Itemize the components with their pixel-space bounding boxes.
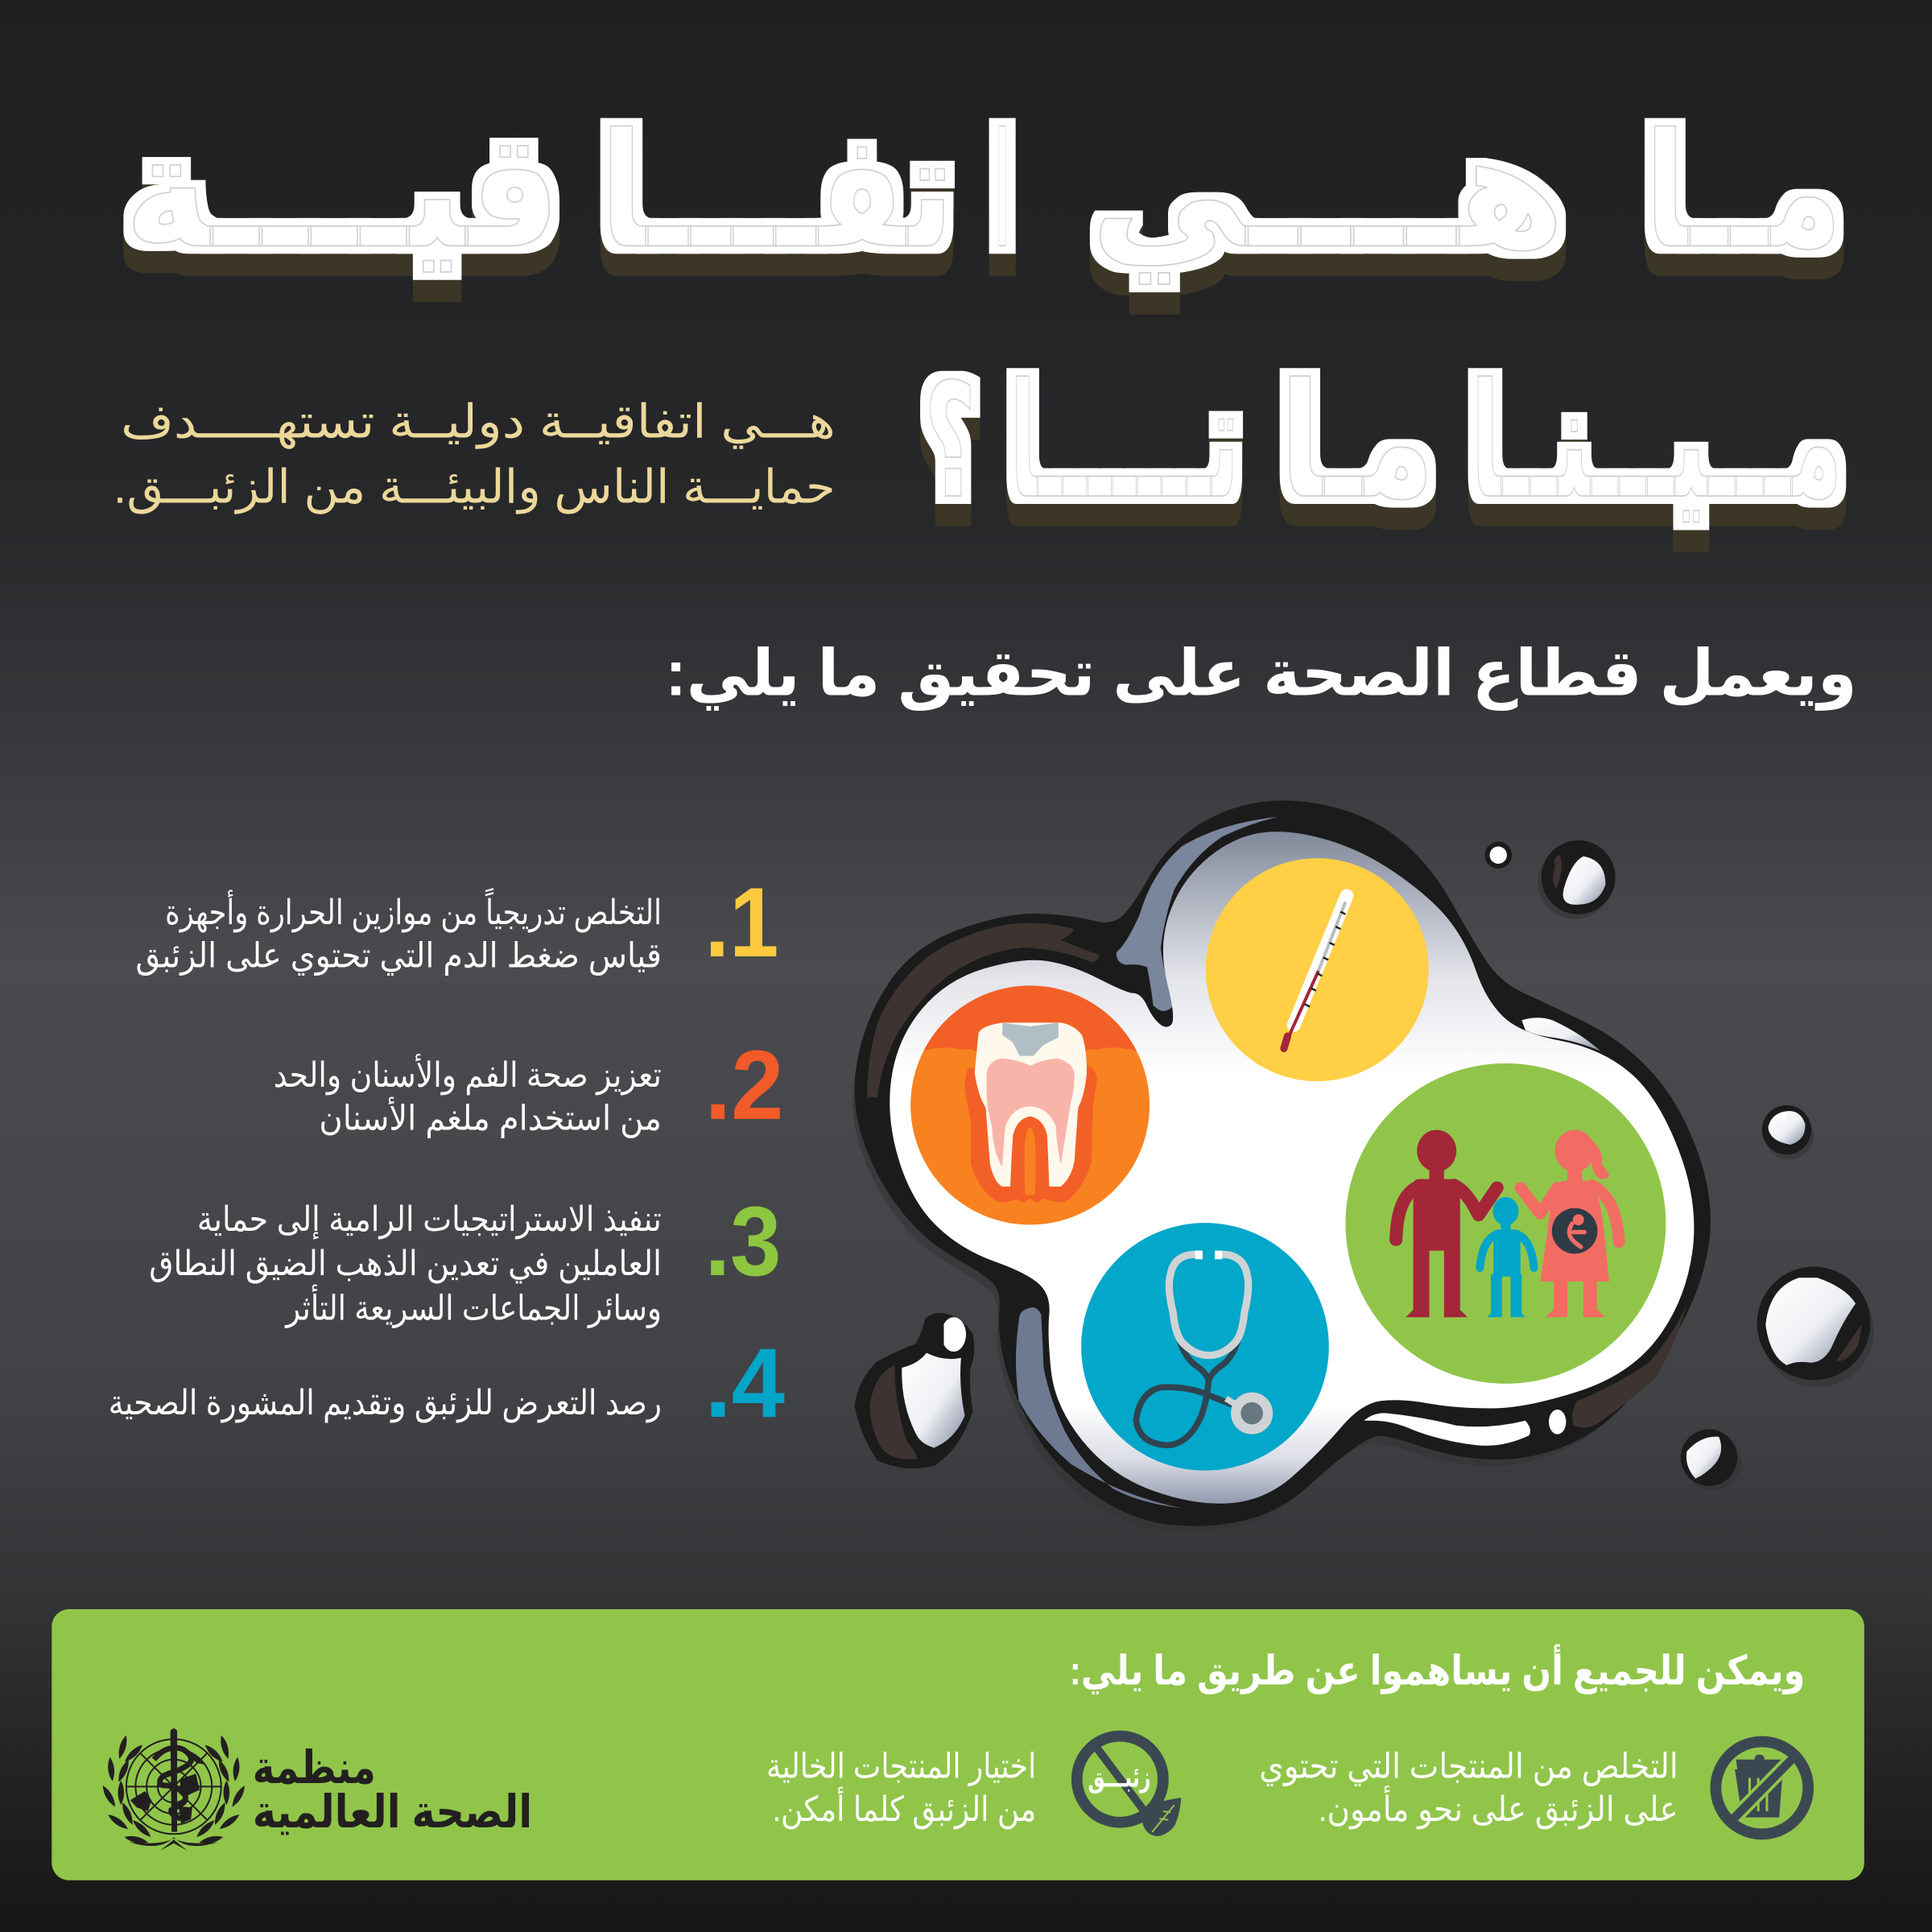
- title line 2: مـا: [1280, 353, 1435, 530]
- woman: [1521, 1130, 1619, 1317]
- logo: WHO name: منظمة: [253, 1743, 376, 1794]
- laurel left: [100, 1735, 153, 1846]
- title line 2: تـــــــا: [1010, 353, 1238, 530]
- item 3 text: تنفيذ الاستراتيجيات الرامية إلى حماية: [197, 1200, 662, 1240]
- list item 2: [274, 1030, 783, 1140]
- action text: choose: [766, 1748, 1036, 1830]
- section heading: ويعمل قطاع الصحة على تحقيق ما يلي:: [666, 637, 1857, 711]
- icon: no trash: [1715, 1742, 1808, 1834]
- droplet large: [1757, 1266, 1874, 1387]
- title line 1: قيــــة: [125, 103, 560, 279]
- number 2: .2: [705, 1030, 783, 1140]
- item 1 text: [135, 888, 662, 976]
- icon: thermometer: [1206, 858, 1429, 1081]
- action text: dispose: [1259, 1748, 1678, 1830]
- item 3 text: وسائر الجماعات السريعة التأثر: [284, 1284, 662, 1328]
- number 3: .3: [705, 1186, 781, 1296]
- action text: choose: من الزئبق كلما أمكن.: [773, 1786, 1036, 1830]
- item 1 text: التخلص تدريجياً من موازين الحرارة وأجهزة: [165, 888, 662, 933]
- title line 1: هــــي: [1091, 103, 1565, 284]
- icon: family: [1345, 1063, 1666, 1384]
- subtitle: [114, 395, 836, 514]
- title line 1: مــا: [1645, 103, 1842, 279]
- title line 1: ا: [996, 103, 1009, 279]
- mercury blob: [852, 805, 1707, 1533]
- droplet bottom right: [1681, 1430, 1741, 1491]
- number 1: .1: [705, 867, 778, 977]
- action text: dispose: التخلص من المنتجات التي تحتوي: [1259, 1748, 1678, 1787]
- list item 4: [109, 1327, 785, 1438]
- logo: WHO name: الصحة العالمية: [253, 1787, 532, 1838]
- action text: choose: اختيار المنتجات الخالية: [766, 1748, 1036, 1786]
- item 1 text: قياس ضغط الدم التي تحتوي على الزئبق: [135, 937, 662, 976]
- child: [1480, 1197, 1534, 1317]
- man: [1396, 1130, 1497, 1317]
- title line 2: [924, 353, 1842, 530]
- droplet right: [1762, 1105, 1814, 1159]
- logo: WHO emblem: [100, 1729, 247, 1851]
- item 3 text: العاملين في تعدين الذهب الضيق النطاق: [149, 1245, 662, 1284]
- icon: tooth: [910, 985, 1150, 1224]
- list item 3: [149, 1186, 781, 1328]
- laurel right: [195, 1735, 247, 1846]
- item 2 text: [274, 1053, 662, 1139]
- title line 1: [125, 103, 1842, 284]
- item 3 text: [149, 1200, 662, 1328]
- panel heading: ويمكن للجميع أن يساهموا عن طريق ما يلي:: [1070, 1643, 1805, 1695]
- logo: WHO name: [253, 1743, 532, 1838]
- action text: dispose: على الزئبق على نحو مأمون.: [1319, 1785, 1678, 1830]
- item 4 text: رصد التعرض للزئبق وتقديم المشورة الصحية: [109, 1384, 662, 1423]
- subtitle: هـــي اتفاقيــة دوليــة تستهـــــدف: [121, 395, 836, 449]
- droplet small: [1484, 841, 1512, 869]
- panel: everyone can contribute: [52, 1609, 1864, 1880]
- title line 2: ؟: [924, 353, 976, 530]
- item 2 text: من استخدام ملغم الأسنان: [319, 1096, 662, 1139]
- icon: no mercury: [1077, 1736, 1181, 1836]
- droplet top right: [1538, 840, 1616, 919]
- droplet left: [857, 1315, 972, 1467]
- number 4: .4: [705, 1327, 785, 1438]
- subtitle: حمايـــة الناس والبيئـــة من الزئبـــق.: [114, 460, 836, 514]
- list item 1: [135, 867, 778, 977]
- icon: no mercury: زئبـــق: [1088, 1761, 1151, 1794]
- title line 1: تفــــا: [600, 103, 954, 279]
- item 2 text: تعزيز صحة الفم والأسنان والحد: [274, 1053, 662, 1096]
- icon: stethoscope: [1081, 1223, 1329, 1471]
